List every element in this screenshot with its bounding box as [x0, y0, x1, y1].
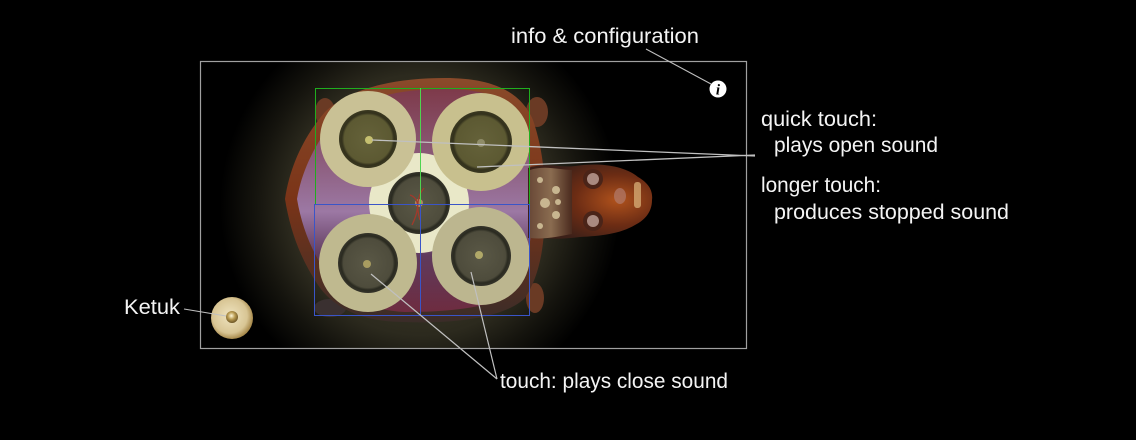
- leader lines: [184, 49, 755, 379]
- shell inner panel: [297, 89, 532, 312]
- gong bottom left: [319, 214, 417, 312]
- turtle head: [528, 164, 652, 239]
- frame: [200, 62, 746, 348]
- icon: ketuk gong: [211, 297, 253, 339]
- label: plays open sound: plays open sound: [774, 134, 938, 157]
- gong top left: [320, 91, 416, 187]
- turtle illustration: [285, 78, 652, 322]
- icon: info button: [710, 80, 726, 98]
- gong top right: [432, 93, 530, 191]
- icon: info button: i: [716, 82, 721, 98]
- close sound zone (blue): [314, 204, 530, 316]
- head neck ornament: [530, 168, 572, 239]
- label: touch plays close sound: touch: plays close sound: [500, 370, 728, 393]
- background glow: [201, 62, 747, 349]
- gong center: [369, 153, 469, 253]
- label: Ketuk: Ketuk: [124, 296, 181, 319]
- label: info and configuration: info & configuration: [511, 25, 699, 48]
- turtle shell: [285, 78, 545, 322]
- head eyes: [583, 169, 641, 231]
- gong bottom right: [432, 207, 530, 305]
- label: produces stopped sound: produces stopped sound: [774, 201, 1009, 224]
- open sound zone (green): [316, 88, 530, 204]
- turtle feet: [314, 97, 548, 317]
- label: longer touch: longer touch:: [761, 174, 881, 197]
- label: quick touch: quick touch:: [761, 108, 877, 131]
